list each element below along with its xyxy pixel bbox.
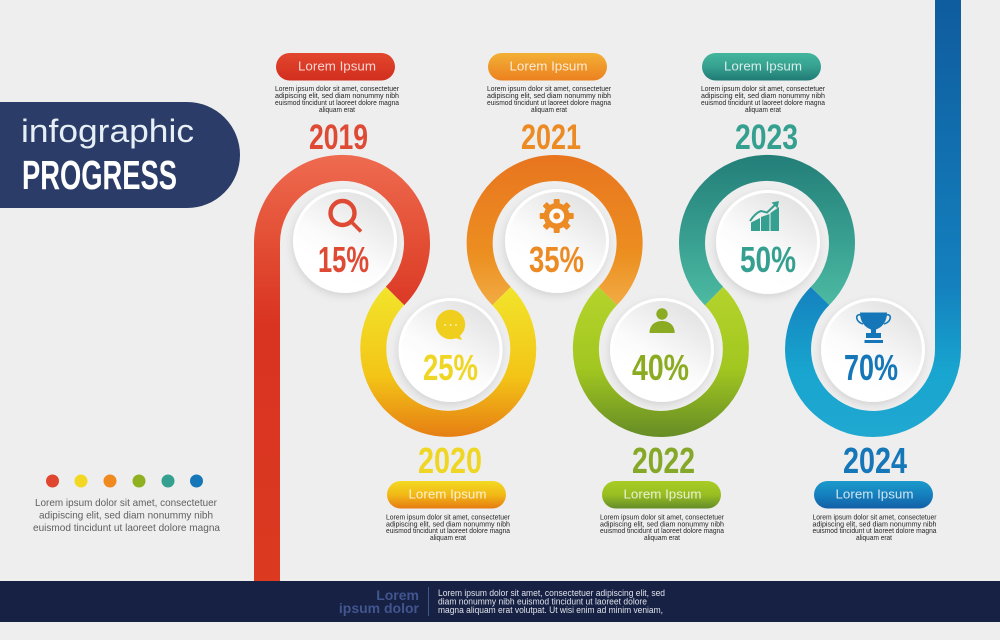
description 2023: euismod tincidunt ut laoreet dolore magna (701, 100, 825, 107)
pill 2024: Lorem Ipsum (836, 488, 914, 502)
description 2021: adipiscing elit, sed diam nonummy nibh (487, 93, 611, 100)
pill 2023: Lorem Ipsum (724, 60, 802, 74)
ribbon timeline (267, 0, 948, 581)
milestone 2024 (812, 298, 937, 542)
percent 70: 70% (844, 347, 898, 388)
disc 2024 (821, 298, 925, 402)
milestone 2019 (275, 53, 400, 293)
legend (33, 474, 220, 534)
description 2020: adipiscing elit, sed diam nonummy nibh (386, 522, 510, 528)
description 2021 (487, 86, 612, 114)
description 2023: aliquam erat (745, 107, 781, 114)
title background (0, 102, 240, 208)
footer heading (339, 587, 420, 616)
description 2020: euismod tincidunt ut laoreet dolore magna (386, 528, 510, 535)
title: PROGRESS: PROGRESS (22, 152, 177, 198)
year 2022: 2022 (632, 440, 695, 481)
pill 2023 (702, 53, 821, 80)
year 2020: 2020 (418, 440, 482, 481)
legend dots (46, 474, 203, 488)
footer heading: Lorem (376, 587, 419, 603)
percent 40: 40% (632, 347, 689, 388)
description 2019: euismod tincidunt ut laoreet dolore magna (275, 100, 399, 107)
icon: trophy (857, 312, 890, 343)
pill 2020: Lorem Ipsum (408, 488, 486, 502)
legend text: adipiscing elit, sed diam nonummy nibh (39, 510, 213, 522)
milestone 2020 (386, 298, 511, 542)
pill 2019 (276, 53, 395, 80)
title: infographic: infographic (21, 113, 194, 149)
icon: person (650, 308, 675, 333)
disc 2021 (505, 189, 609, 293)
disc 2022 (610, 298, 714, 402)
footer text: magna aliquam erat volutpat. Ut wisi enim ad minim veniam, (438, 605, 663, 615)
description 2023 (701, 86, 826, 114)
year 2023: 2023 (735, 118, 798, 157)
title panel (0, 102, 240, 208)
description 2024 (812, 514, 937, 542)
milestone 2022 (600, 298, 725, 542)
pill 2022 (602, 481, 721, 508)
milestone 2023 (701, 53, 826, 294)
description 2019 (275, 86, 400, 114)
footer text: diam nonummy nibh euismod tincidunt ut laoreet dolore (438, 596, 647, 606)
pill 2021: Lorem Ipsum (510, 60, 588, 74)
icon: growth chart (750, 201, 779, 231)
pill 2020 (387, 481, 506, 508)
footer bar (0, 581, 1000, 622)
segment: 2020 yellow (373, 296, 523, 424)
percent 25: 25% (423, 347, 478, 388)
year 2024: 2024 (843, 440, 908, 481)
segment: 2022 green (586, 296, 736, 424)
milestone 2021 (487, 53, 612, 293)
description 2020: Lorem ipsum dolor sit amet, consectetuer (386, 514, 511, 522)
icon: magnifier (330, 201, 361, 232)
legend text: euismod tincidunt ut laoreet dolore magna (33, 522, 220, 534)
segment: 2024 blue (798, 0, 948, 424)
pill 2022: Lorem Ipsum (624, 488, 702, 502)
pill 2019: Lorem Ipsum (298, 60, 376, 74)
description 2021: Lorem ipsum dolor sit amet, consectetuer (487, 86, 612, 93)
footer heading: ipsum dolor (339, 600, 420, 616)
disc 2019 (293, 189, 397, 293)
description 2021: aliquam erat (531, 107, 567, 114)
segment: 2019 red (267, 168, 417, 581)
footer text: Lorem ipsum dolor sit amet, consectetuer adipiscing elit, sed (438, 588, 665, 598)
description 2023: adipiscing elit, sed diam nonummy nibh (701, 93, 825, 100)
legend text (33, 497, 220, 534)
description 2022: adipiscing elit, sed diam nonummy nibh (600, 522, 724, 528)
pill 2021 (488, 53, 607, 80)
description 2024: Lorem ipsum dolor sit amet, consectetuer (812, 514, 937, 522)
description 2022 (600, 514, 725, 542)
icon: speech bubble (436, 310, 465, 340)
icon: gear (540, 199, 574, 233)
description 2024: euismod tincidunt ut laoreet dolore magna (812, 528, 937, 535)
segment: 2021 orange (480, 168, 630, 296)
footer background (0, 581, 1000, 622)
description 2022: Lorem ipsum dolor sit amet, consectetuer (600, 514, 725, 522)
footer divider (428, 587, 429, 616)
description 2020: aliquam erat (430, 535, 466, 542)
description 2022: aliquam erat (644, 535, 680, 542)
pill 2024 (814, 481, 933, 508)
description 2024: adipiscing elit, sed diam nonummy nibh (812, 522, 937, 528)
disc 2020 (398, 298, 502, 402)
description 2020 (386, 514, 511, 542)
segment: 2023 teal (692, 168, 842, 296)
description 2022: euismod tincidunt ut laoreet dolore magna (600, 528, 724, 535)
description 2019: adipiscing elit, sed diam nonummy nibh (275, 93, 399, 100)
percent 50: 50% (740, 239, 796, 280)
footer text (438, 588, 665, 615)
percent 35: 35% (529, 239, 584, 280)
description 2024: aliquam erat (856, 535, 892, 542)
year 2021: 2021 (521, 118, 581, 157)
disc 2023 (716, 190, 820, 294)
percent 15: 15% (318, 239, 369, 280)
description 2019: aliquam erat (319, 107, 355, 114)
description 2019: Lorem ipsum dolor sit amet, consectetuer (275, 86, 400, 93)
description 2021: euismod tincidunt ut laoreet dolore magna (487, 100, 611, 107)
description 2023: Lorem ipsum dolor sit amet, consectetuer (701, 86, 826, 93)
year 2019: 2019 (309, 118, 368, 157)
legend text: Lorem ipsum dolor sit amet, consectetuer (35, 497, 217, 509)
